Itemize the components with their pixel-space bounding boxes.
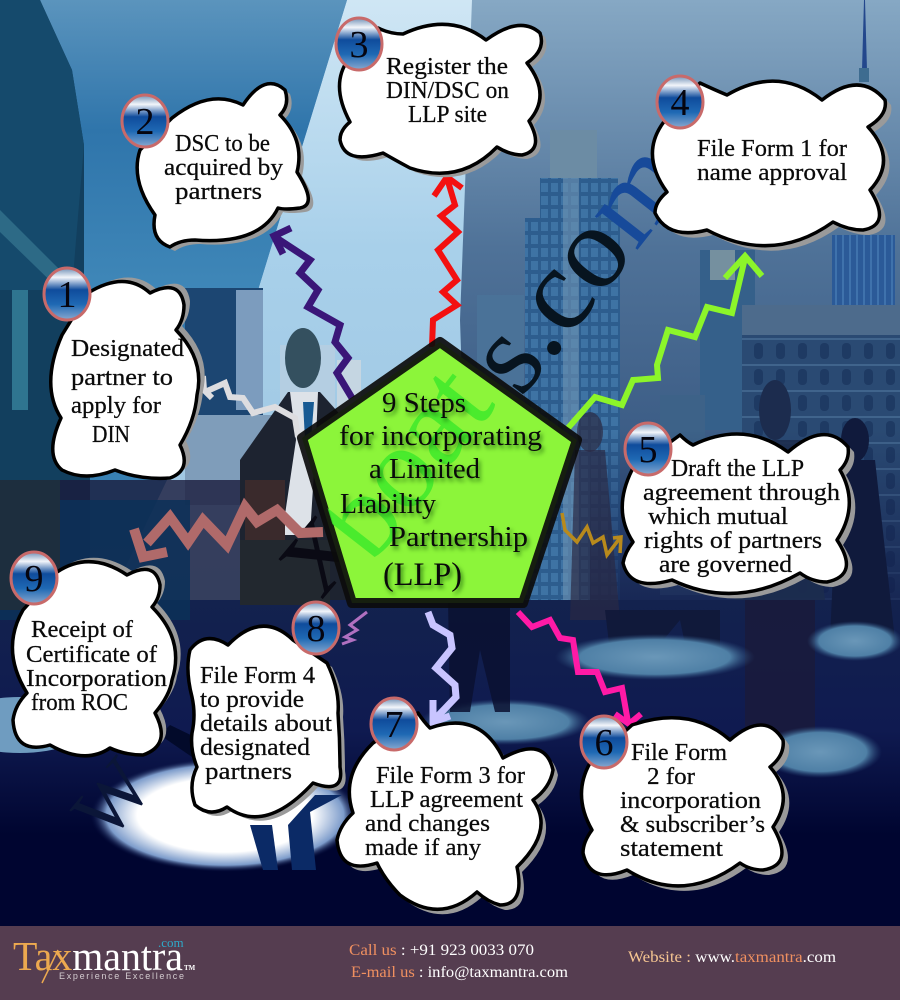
step 1 callout [44, 268, 205, 478]
pentagon heading: Liability [340, 488, 436, 520]
logo: Taxmantra: .com [158, 935, 184, 950]
pentagon heading: a Limited [369, 453, 480, 485]
step 6 badge: 6 [594, 722, 614, 764]
step 6 badge [581, 716, 627, 768]
step 3 text: LLP site [408, 102, 487, 128]
step 3 callout [336, 18, 546, 177]
arrow 8: small mauve [342, 612, 367, 644]
step 4 text: name approval [697, 160, 847, 186]
step 7 text: LLP agreement [370, 787, 523, 813]
step 1 badge [44, 268, 90, 320]
watermark: www: W [55, 742, 169, 854]
watermark: s.com: s.com [438, 115, 713, 415]
step 3 badge [336, 18, 382, 70]
step 5 text: Draft the LLP [671, 456, 804, 482]
suited man silhouette [240, 328, 360, 605]
pentagon heading: Partnership [389, 521, 528, 553]
step 8 text: File Form 4 [200, 663, 315, 689]
step 2 text [164, 131, 283, 205]
arrow 2: purple [274, 228, 352, 398]
step 4 badge [657, 76, 703, 128]
step 4 callout [652, 76, 891, 251]
step 2 badge: 2 [136, 101, 154, 143]
step 9 text [26, 617, 167, 716]
step 1 badge: 1 [58, 274, 76, 316]
step 3 text: Register the [386, 54, 508, 80]
step 8 badge [293, 602, 339, 654]
step 2 badge [122, 95, 168, 147]
step 2 text: DSC to be [175, 131, 270, 157]
step 6 callout [581, 716, 789, 891]
logo: Taxmantra: Taxmantra [13, 933, 183, 979]
step 7 badge: 7 [384, 704, 404, 746]
step 1 text: partner to [71, 365, 173, 391]
step 6 text [620, 740, 765, 862]
step 6 text: & subscriber’s [620, 812, 765, 838]
step 2 text: acquired by [164, 155, 283, 181]
footer band [0, 926, 900, 1000]
arrow 6: pink [518, 612, 641, 724]
step 6 text: File Form [631, 740, 727, 766]
step 4 text [697, 136, 847, 186]
step 5 callout [622, 423, 855, 598]
step 1 text [71, 336, 184, 448]
step 8 text: designated [200, 735, 310, 761]
step 7 text: made if any [365, 835, 481, 861]
step 3 badge: 3 [350, 24, 368, 66]
logo: Taxmantra: TM [184, 964, 196, 972]
arrow 7: lavender [428, 612, 456, 722]
step 7 callout [337, 698, 558, 914]
step 6 text: 2 for [647, 764, 695, 790]
step 6 text: incorporation [620, 788, 761, 814]
step 5 badge: 5 [638, 429, 658, 471]
arrow 9: brown [134, 507, 323, 557]
step 9 badge: 9 [24, 558, 44, 600]
contact: email: E-mail us : info@taxmantra.com [351, 964, 568, 981]
step 8 text: to provide [200, 687, 304, 713]
watermark: x: x [234, 476, 386, 619]
central pentagon [289, 340, 577, 603]
step 9 text: Receipt of [31, 617, 133, 643]
pentagon heading: for incorporating [339, 420, 542, 452]
pentagon heading: 9 Steps [382, 387, 466, 419]
arrow 4: lime green [568, 256, 762, 428]
pentagon heading: (LLP) [383, 557, 462, 593]
step 1 text: DIN [92, 422, 130, 448]
step 4 text: File Form 1 for [697, 136, 847, 162]
step 8 text [200, 663, 332, 785]
step 5 text: which mutual [648, 504, 788, 530]
step 9 text: from ROC [31, 690, 128, 716]
step 9 badge [11, 552, 57, 604]
step 3 text [386, 54, 509, 128]
step 3 text: DIN/DSC on [386, 78, 509, 104]
step 8 text: partners [205, 759, 292, 785]
step 7 badge [371, 698, 417, 750]
step 7 text: and changes [365, 811, 490, 837]
step 5 text: rights of partners [644, 528, 822, 554]
step 4 badge: 4 [670, 82, 690, 124]
logo: Taxmantra: Experience Excellence [59, 971, 184, 981]
arrow 3: red [432, 177, 462, 347]
step 5 badge [625, 423, 671, 475]
watermark: boat: boat [289, 340, 518, 581]
step 2 callout [122, 84, 313, 251]
step 9 text: Incorporation [26, 666, 167, 692]
step 5 text: are governed [659, 552, 792, 578]
pentagon heading [339, 387, 542, 593]
floor light pools [0, 621, 900, 778]
step 7 text: File Form 3 for [376, 763, 525, 789]
contact: website: Website : www.taxmantra .com [628, 949, 836, 966]
step 2 text: partners [175, 179, 262, 205]
spotlight on floor [90, 758, 360, 872]
step 8 badge: 8 [306, 608, 326, 650]
step 1 text: apply for [71, 393, 161, 419]
step 5 text: agreement through [643, 480, 840, 506]
step 8 callout [188, 602, 346, 821]
step 9 text: Certificate of [26, 642, 157, 668]
step 6 text: statement [620, 836, 723, 862]
arrow 1: white [203, 376, 298, 437]
arrow 5: orange [562, 513, 621, 555]
step 1 text: Designated [71, 336, 184, 362]
contact: phone: Call us : +91 923 0033 070 [349, 942, 534, 959]
step 7 text [365, 763, 525, 861]
step 5 text [643, 456, 840, 578]
step 8 text: details about [200, 711, 332, 737]
step 9 callout [11, 552, 181, 756]
